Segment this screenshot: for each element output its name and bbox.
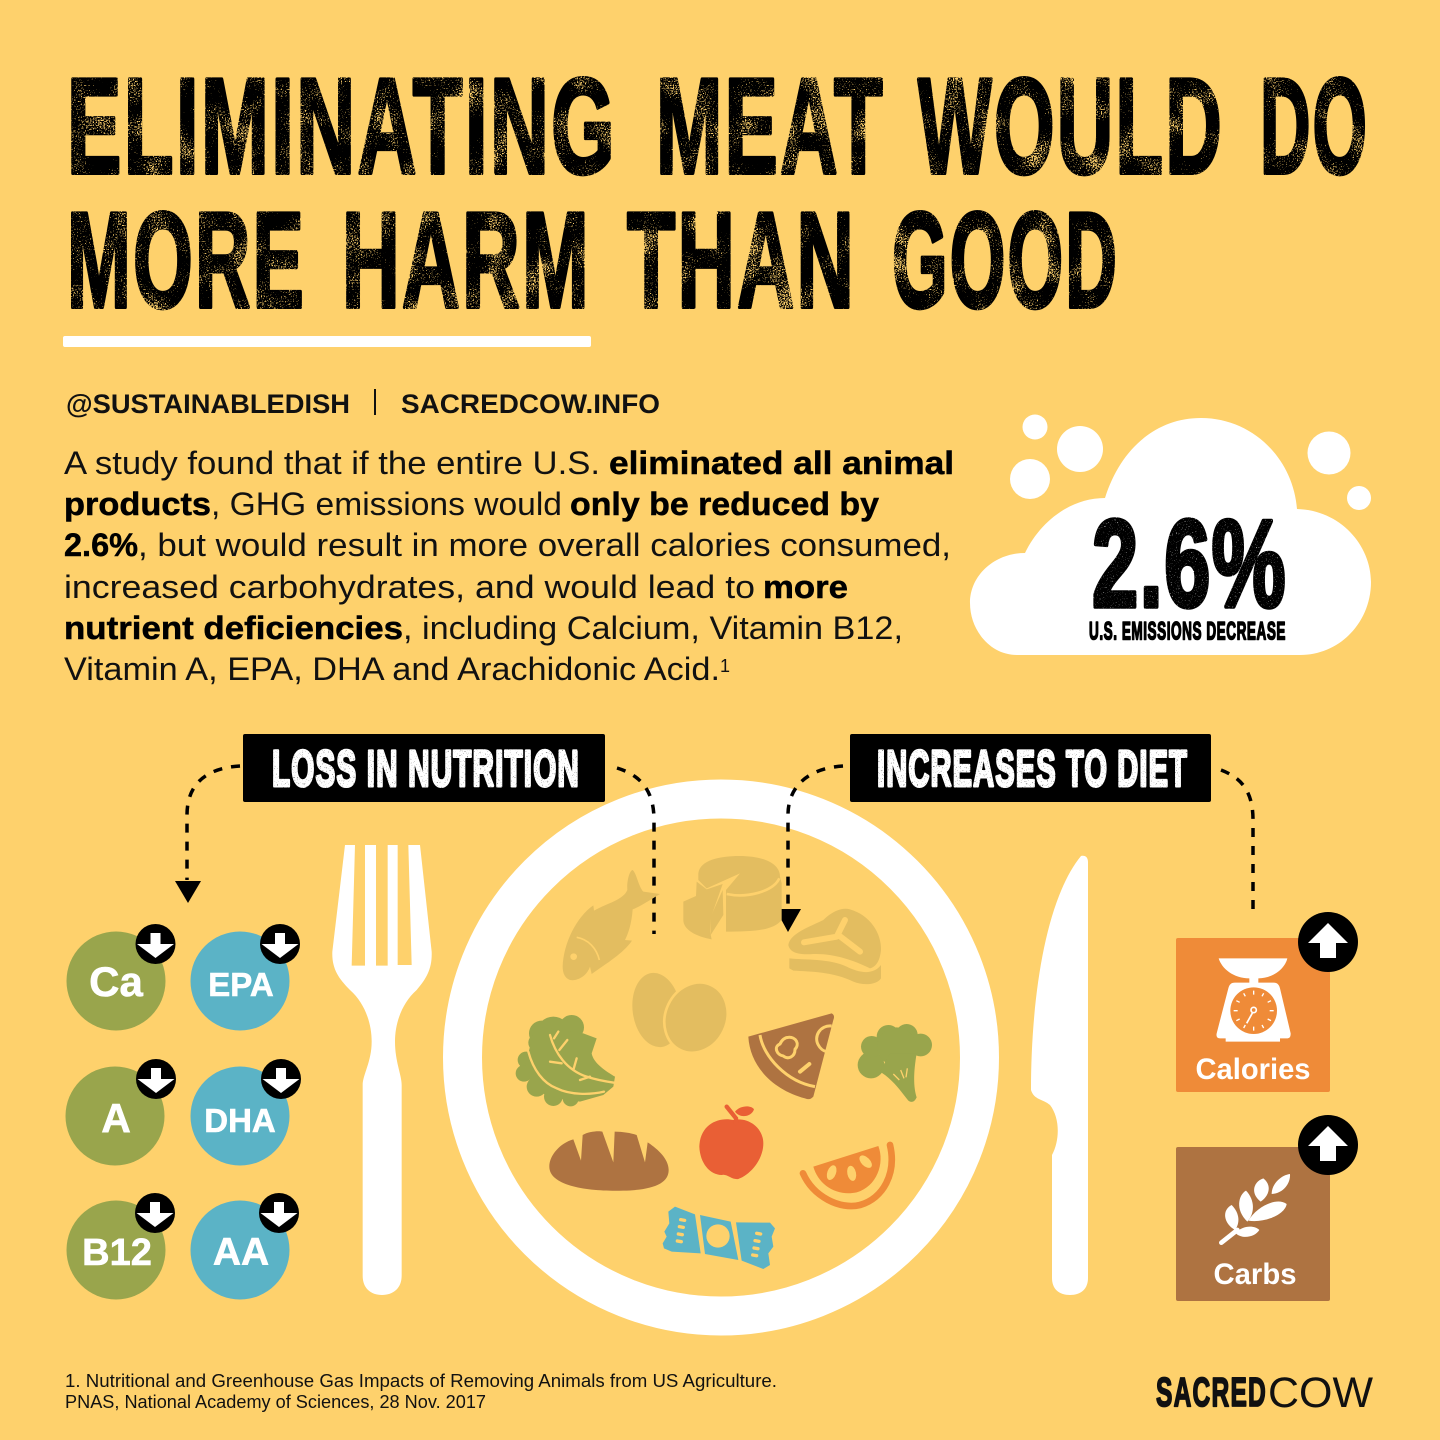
icon: kitchen scale (1216, 958, 1291, 1042)
plate (462, 799, 980, 1316)
nutrient: B12: B12 (82, 1232, 152, 1274)
title: WOULD (918, 50, 1224, 202)
icon: broccoli (858, 1024, 932, 1102)
icon: lettuce (516, 1015, 615, 1106)
body paragraph: 2.6% (64, 527, 138, 563)
cloud shape (970, 418, 1371, 655)
body paragraph: 1 (720, 656, 730, 676)
nutrient: DHA (190, 1059, 301, 1166)
icon: snack bar (663, 1207, 775, 1269)
nutrient panel (66, 924, 301, 1300)
calories label: Calories (1196, 1053, 1310, 1086)
body paragraph: increased carbohydrates, and would lead to (64, 569, 755, 605)
icon: orange slice (803, 1145, 892, 1206)
icon: wheat (1221, 1174, 1290, 1243)
title: HARM (342, 184, 591, 336)
nutrient: calcium (66, 924, 176, 1030)
icon: cheese (683, 856, 782, 939)
social handles: @SUSTAINABLEDISH (66, 389, 350, 419)
body paragraph: , but would result in more overall calories consumed, (138, 527, 951, 563)
nutrient: vitamin A (66, 1059, 176, 1166)
social handles: SACREDCOW.INFO (401, 389, 660, 419)
title: MORE (67, 184, 306, 336)
heading: loss in nutrition: LOSS IN NUTRITION (272, 740, 580, 797)
carbs label: Carbs (1214, 1258, 1296, 1291)
badge: up arrow (1298, 912, 1358, 972)
footnote: 1. Nutritional and Greenhouse Gas Impacts of Removing Animals from US Agriculture. (65, 1370, 777, 1391)
body paragraph: Vitamin A, EPA, DHA and Arachidonic Acid. (64, 651, 720, 687)
panel: calories (1176, 912, 1358, 1092)
icon: fork (332, 845, 432, 1295)
body paragraph: nutrient deficiencies (64, 610, 403, 646)
icon: steak (788, 909, 881, 984)
nutrient: DHA: DHA (204, 1102, 276, 1139)
title: ELIMINATING (67, 50, 617, 202)
2.6% figure: 2.6% (1092, 496, 1287, 634)
title: THAN (627, 184, 856, 336)
panel: carbs (1176, 1115, 1358, 1301)
body paragraph: , GHG emissions would (211, 486, 562, 522)
nutrient: vitamin A: A (101, 1095, 131, 1141)
nutrient: B12 (66, 1193, 175, 1300)
nutrient: EPA (190, 924, 300, 1030)
logo: sacred cow: COW (1268, 1369, 1373, 1417)
nutrient: calcium: Ca (89, 958, 143, 1005)
body paragraph: eliminated all animal (609, 445, 954, 481)
arrow: increases to boxes (1221, 770, 1253, 912)
title: GOOD (892, 184, 1119, 336)
logo: sacred cow: SACRED (1156, 1369, 1267, 1415)
heading: increases to diet: INCREASES TO DIET (877, 740, 1188, 797)
title underline (63, 336, 591, 347)
nutrient: AA (190, 1193, 299, 1300)
arrow: loss from plate (617, 768, 654, 934)
nutrient: AA: AA (213, 1231, 269, 1274)
body paragraph: more (763, 569, 848, 605)
icon: knife (1031, 856, 1088, 1295)
footnote (65, 1370, 777, 1412)
foods on plate (516, 856, 932, 1269)
title (67, 50, 1369, 336)
body paragraph: products (64, 486, 211, 522)
arrow: loss to nutrients (175, 766, 240, 903)
heading: loss in nutrition (243, 734, 605, 802)
nutrient: EPA: EPA (208, 966, 274, 1003)
icon: eggs (628, 970, 739, 1063)
footnote: PNAS, National Academy of Sciences, 28 Nov. 2017 (65, 1391, 486, 1412)
icon: bread (549, 1131, 669, 1191)
icon: fish (563, 870, 660, 980)
heading: increases to diet (850, 734, 1211, 802)
icon: apple (699, 1106, 763, 1179)
cloud bubbles (1010, 414, 1371, 510)
title: MEAT (656, 50, 885, 202)
body paragraph: A study found that if the entire U.S. (64, 445, 600, 481)
arrow: increases to plate (776, 766, 843, 932)
body paragraph: only be reduced by (570, 486, 879, 522)
callout: emissions cloud (970, 414, 1371, 655)
icon: pizza (748, 1013, 834, 1099)
social handles (66, 389, 660, 419)
badge: up arrow (1298, 1115, 1358, 1175)
body paragraph (64, 445, 954, 687)
body paragraph: , including Calcium, Vitamin B12, (403, 610, 903, 646)
